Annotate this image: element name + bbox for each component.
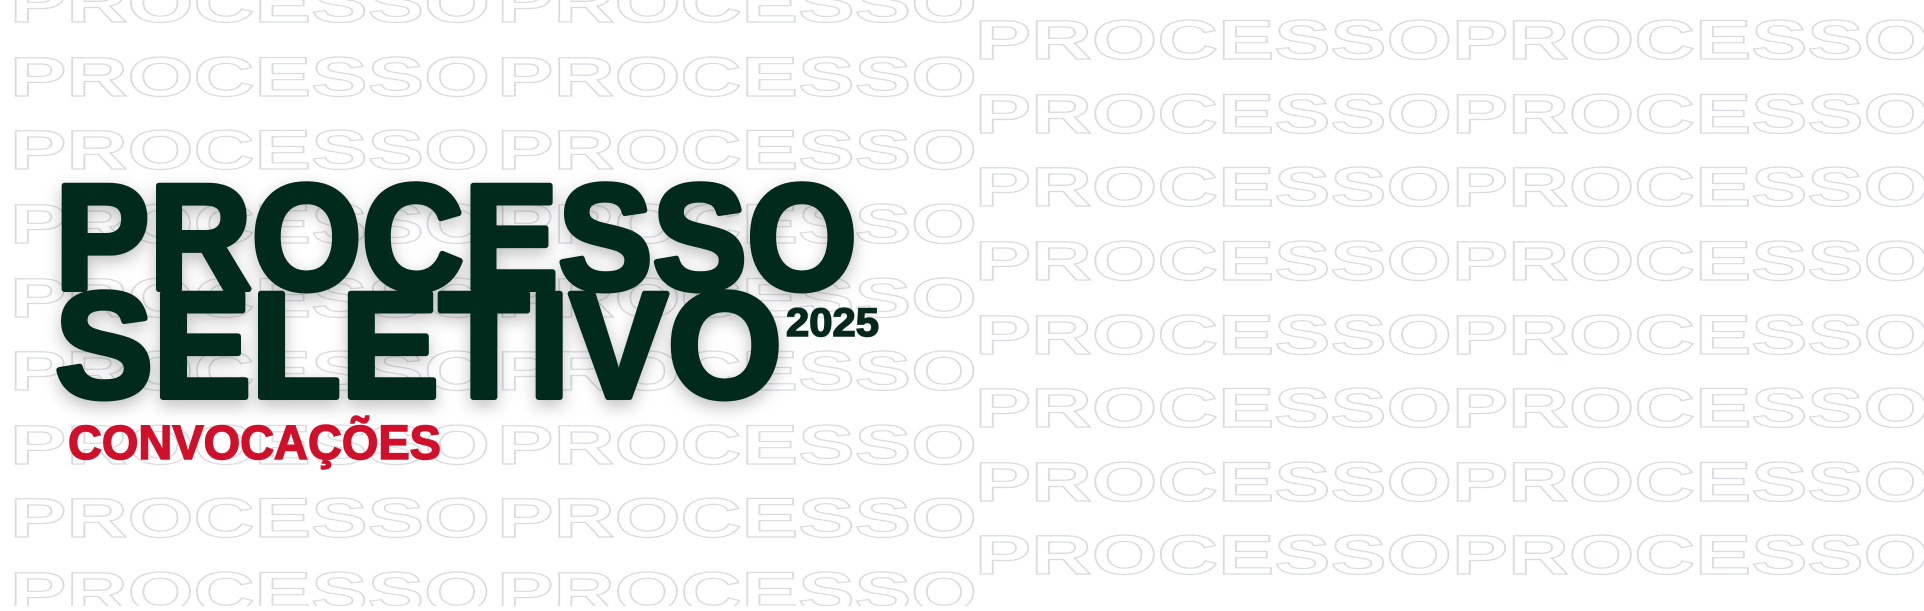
background pattern: outlined PROCESSO rows: PROCESSO [975,229,1452,292]
background pattern: outlined PROCESSO rows: PROCESSO [1452,229,1924,292]
background pattern: outlined PROCESSO rows: PROCESSO [1452,155,1924,218]
background pattern: outlined PROCESSO rows: PROCESSO [497,192,977,255]
background pattern: outlined PROCESSO rows: PROCESSO [10,413,490,476]
title: PROCESSO SELETIVO [55,153,857,429]
background pattern: outlined PROCESSO rows: PROCESSO [10,45,490,108]
background pattern: outlined PROCESSO rows: PROCESSO [1452,523,1924,586]
background pattern: outlined PROCESSO rows: PROCESSO [10,266,490,329]
background pattern: outlined PROCESSO rows: PROCESSO [975,303,1452,366]
background pattern: outlined PROCESSO rows: PROCESSO [497,266,977,329]
background pattern: outlined PROCESSO rows: PROCESSO [497,45,977,108]
background pattern: outlined PROCESSO rows: PROCESSO [975,155,1452,218]
subtitle: CONVOCAÇÕES: CONVOCAÇÕES [68,415,441,470]
background pattern: outlined PROCESSO rows: PROCESSO [10,192,490,255]
year 2025: 2025 [786,301,879,345]
background pattern: outlined PROCESSO rows: PROCESSO [975,82,1452,145]
background pattern: outlined PROCESSO rows: PROCESSO [975,376,1452,439]
background pattern: outlined PROCESSO rows: PROCESSO [497,339,977,402]
background pattern: outlined PROCESSO rows: PROCESSO [10,339,490,402]
background pattern: outlined PROCESSO rows: PROCESSO [975,450,1452,513]
background pattern: outlined PROCESSO rows: PROCESSO [1452,376,1924,439]
background pattern: outlined PROCESSO rows: PROCESSO [10,118,490,181]
background pattern: outlined PROCESSO rows: PROCESSO [1452,450,1924,513]
title: PROCESSO SELETIVO: PROCESSO [55,153,857,321]
background pattern: outlined PROCESSO rows: PROCESSO [1452,82,1924,145]
background pattern: outlined PROCESSO rows: PROCESSO [497,118,977,181]
background pattern: outlined PROCESSO rows: PROCESSO [975,8,1452,71]
background pattern: outlined PROCESSO rows: PROCESSO [975,523,1452,586]
background pattern: outlined PROCESSO rows: PROCESSO [1452,8,1924,71]
title: PROCESSO SELETIVO: SELETIVO [55,261,782,429]
background pattern: outlined PROCESSO rows: PROCESSO [1452,303,1924,366]
background pattern: outlined PROCESSO rows: PROCESSO [10,486,490,549]
background pattern: outlined PROCESSO rows: PROCESSO [497,486,977,549]
background pattern: outlined PROCESSO rows: PROCESSO [497,413,977,476]
